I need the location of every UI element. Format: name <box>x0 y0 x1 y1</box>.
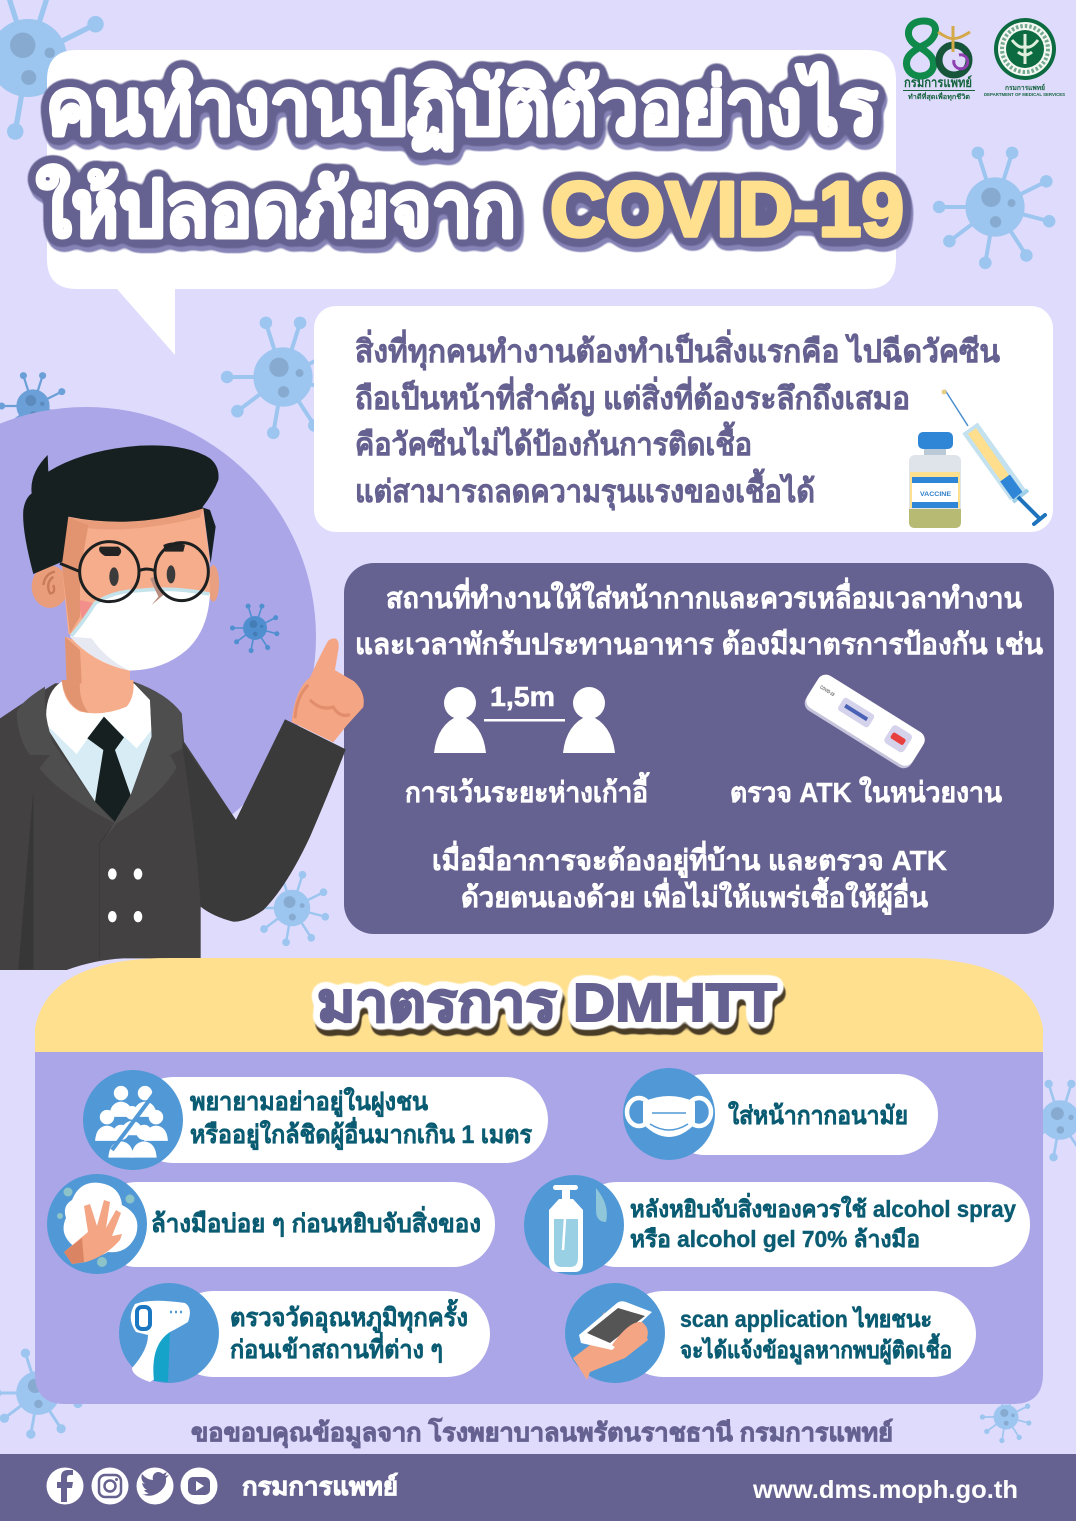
character: man in mask pointing <box>0 445 364 970</box>
workplace intro text: สถานที่ทำงานให้ใส่หน้ากากและควรเหลื่อมเวลาทำงาน <box>386 577 1022 615</box>
panel: DMHTT measures body <box>35 1050 1043 1404</box>
text: alcohol: หรือ alcohol gel 70% ล้างมือ <box>630 1226 920 1252</box>
text: alcohol <box>630 1192 1016 1252</box>
icon: crowd <box>83 1070 183 1170</box>
text: scan application <box>680 1305 952 1365</box>
text: wash hands: ล้างมือบ่อย ๆ ก่อนหยิบจับสิ่งของ <box>151 1206 481 1238</box>
virus: above man <box>221 317 343 439</box>
logos <box>903 18 1065 101</box>
item: wash hands <box>47 1174 495 1274</box>
icon: thermometer gun <box>119 1283 219 1383</box>
text: scan application: จะได้แจ้งข้อมูลหากพบผู้ติดเชื้อ <box>680 1333 952 1365</box>
icon: hand washing <box>47 1174 147 1274</box>
item: temperature check <box>119 1283 490 1383</box>
title speech bubble <box>47 50 896 355</box>
icon: twitter <box>136 1468 174 1504</box>
intro text: คือวัคซีนไม่ได้ป้องกันการติดเชื้อ <box>355 421 752 462</box>
footer website: www.dms.moph.go.th <box>752 1476 1018 1504</box>
logo: 80 years <box>903 21 975 101</box>
virus: bottom left <box>0 1348 83 1439</box>
text: scan application: scan application ไทยชนะ <box>680 1305 932 1332</box>
item: avoid crowds <box>83 1070 548 1170</box>
icon: syringe <box>942 390 1045 524</box>
title <box>36 62 904 253</box>
item: scan application <box>565 1283 976 1383</box>
virus: small left <box>0 372 67 441</box>
text: temperature check <box>230 1298 468 1364</box>
virus: top left <box>0 0 108 140</box>
intro text: ถือเป็นหน้าที่สำคัญ แต่สิ่งที่ต้องระลึกถึงเสมอ <box>355 376 910 417</box>
virus: inside purple circle <box>230 604 279 653</box>
logo: ministry of public health: DEPARTMENT OF MEDICAL SERVICES <box>984 92 1065 97</box>
label: ATK test: ตรวจ ATK ในหน่วยงาน <box>730 776 1002 808</box>
panel: vaccine intro <box>314 306 1053 532</box>
credit text: ขอขอบคุณข้อมูลจาก โรงพยาบาลนพรัตนราชธานี กรมการแพทย์ <box>191 1417 893 1449</box>
text: temperature check: ก่อนเข้าสถานที่ต่าง ๆ <box>230 1332 443 1364</box>
label: seat distancing: การเว้นระยะห่างเก้าอี้ <box>405 771 650 808</box>
intro text: สิ่งที่ทุกคนทำงานต้องทำเป็นสิ่งแรกคือ ไปฉีดวัคซีน <box>355 329 1000 371</box>
virus: right edge <box>1019 1080 1076 1161</box>
closing advice text: ด้วยตนเองด้วย เพื่อไม่ให้แพร่เชื้อให้ผู้อื่น <box>461 876 928 915</box>
footer bar <box>0 1454 1076 1521</box>
purple circle behind character <box>0 407 316 867</box>
icon: face mask <box>623 1068 715 1160</box>
panel: DMHTT heading band <box>35 958 1043 1052</box>
icon: ATK test <box>801 671 928 772</box>
closing advice text: เมื่อมีอาการจะต้องอยู่ที่บ้าน และตรวจ ATK <box>432 840 947 878</box>
virus: beside elbow <box>254 871 329 946</box>
icon: vaccine vial <box>909 432 961 528</box>
icon: facebook <box>46 1468 84 1504</box>
COVID-19 highlight: COVID-19 <box>550 165 904 253</box>
icon: 1.5m distancing <box>434 681 615 753</box>
virus: bottom right <box>980 1392 1031 1443</box>
title line 2: ให้ปลอดภัยจาก <box>36 164 516 253</box>
logo: ministry of public health: กรมการแพทย์ <box>1005 83 1045 92</box>
logo: 80 years: กรมการแพทย์ <box>904 75 972 90</box>
icon: youtube <box>180 1468 218 1504</box>
item: alcohol <box>524 1175 1030 1275</box>
text: temperature check: ตรวจวัดอุณหภูมิทุกครั้ง <box>230 1298 468 1334</box>
text: wear mask: ใส่หน้ากากอนามัย <box>728 1100 908 1130</box>
icon: instagram <box>92 1468 128 1504</box>
workplace intro text <box>355 577 1043 661</box>
closing advice text <box>432 840 947 915</box>
text: avoid crowds: พยายามอย่าอยู่ในฝูงชน <box>190 1086 428 1118</box>
workplace intro text: และเวลาพักรับประทานอาหาร ต้องมีมาตรการป้องกัน เช่น <box>355 629 1043 661</box>
logo: ministry of public health <box>984 18 1065 97</box>
icon: phone in hand <box>565 1283 665 1383</box>
body: jacket, shirt and tie <box>0 680 346 970</box>
text: avoid crowds <box>190 1086 533 1151</box>
text: avoid crowds: หรืออยู่ใกล้ชิดผู้อื่นมากเกิน 1 เมตร <box>190 1117 533 1151</box>
intro text: แต่สามารถลดความรุนแรงของเชื้อได้ <box>355 468 815 511</box>
head with glasses and mask <box>23 445 219 683</box>
panel: workplace measures <box>344 563 1054 934</box>
text: alcohol: หลังหยิบจับสิ่งของควรใช้ alcohol spray <box>630 1192 1016 1222</box>
virus: right of title <box>933 147 1055 269</box>
icon: ATK test: COVID-19 <box>819 685 835 698</box>
heading: DMHTT: มาตรการ DMHTT <box>317 973 777 1033</box>
icon: vaccine vial: VACCINE <box>920 491 952 498</box>
footer organisation name: กรมการแพทย์ <box>242 1472 398 1501</box>
logo: 80 years: ทำดีที่สุดเพื่อทุกชีวิต <box>908 91 970 101</box>
item: wear mask <box>623 1068 938 1160</box>
hand <box>292 638 364 742</box>
icon: sanitizer bottle <box>524 1175 624 1275</box>
title line 1: คนทำงานปฏิบัติตัวอย่างไร <box>46 62 878 151</box>
icon: 1.5m distancing: 1,5m <box>490 681 555 712</box>
intro text <box>355 329 1000 511</box>
